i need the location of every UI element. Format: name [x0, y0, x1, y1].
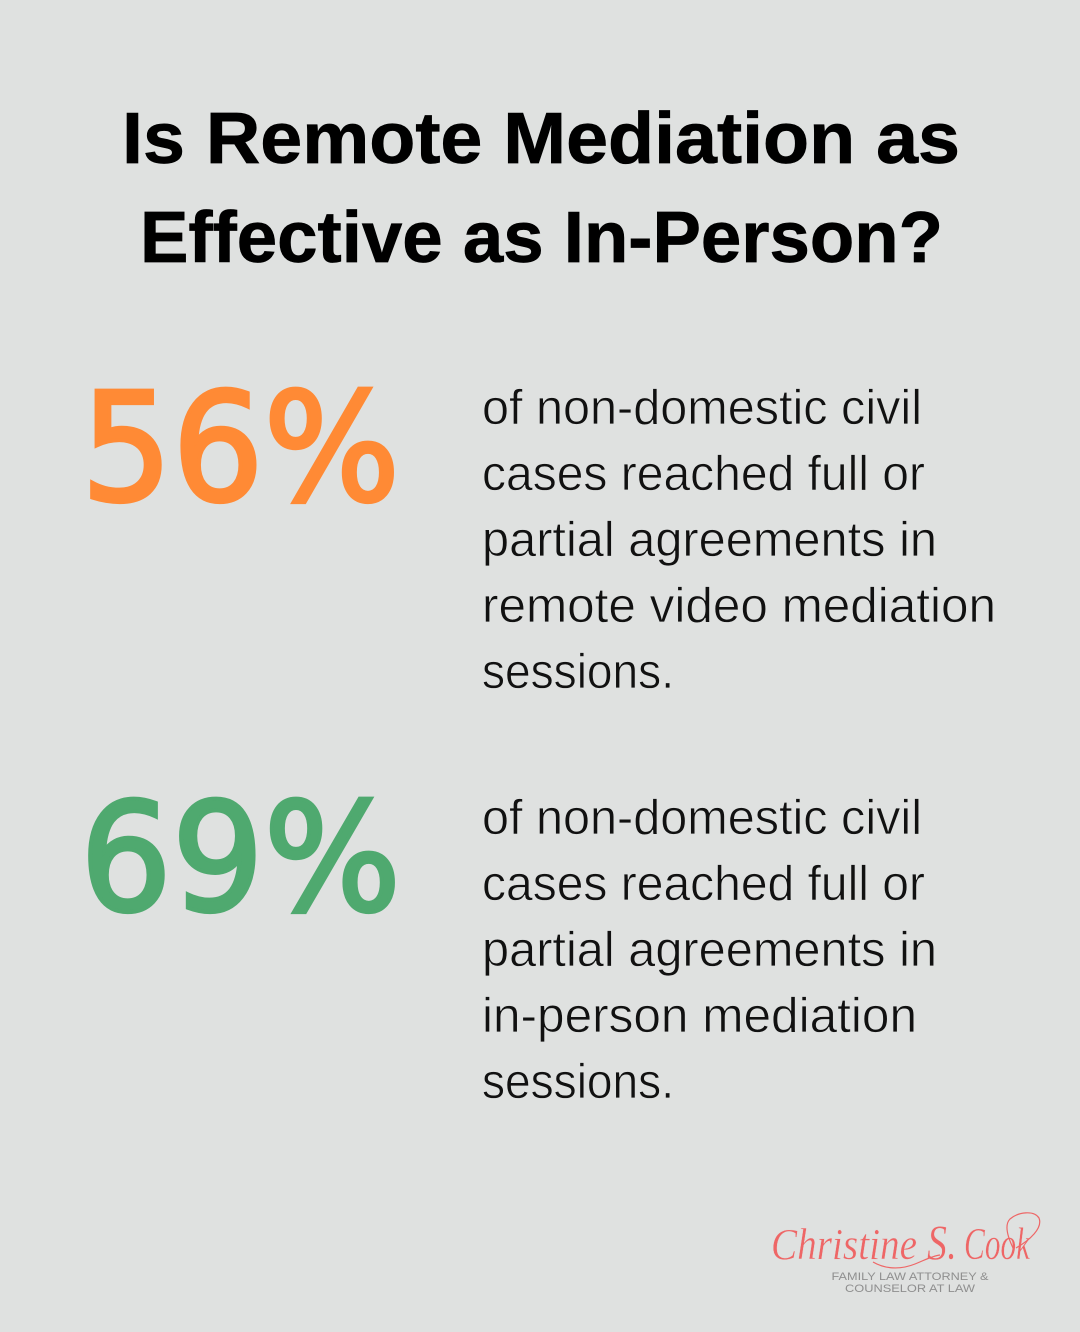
- description: remote mediation: partial agreements in: [482, 513, 937, 567]
- logo: Christine S. Cook: S.: [927, 1214, 957, 1270]
- logo: Christine S. Cook: Cook: [964, 1218, 1031, 1269]
- logo: Christine S. Cook: Christine: [771, 1220, 917, 1269]
- description: in-person mediation: of non-domestic civil: [482, 791, 922, 845]
- description: remote mediation: cases reached full or: [482, 447, 925, 501]
- description: remote mediation: [482, 381, 996, 699]
- logo: Christine S. Cook: [771, 1213, 1040, 1295]
- description: in-person mediation: sessions.: [482, 1055, 674, 1109]
- description: in-person mediation: in-person mediation: [482, 989, 917, 1043]
- title: [122, 99, 960, 278]
- title: Is Remote Mediation as: [122, 99, 960, 179]
- logo: Christine S. Cook: FAMILY LAW ATTORNEY &: [832, 1271, 989, 1283]
- description: in-person mediation: [482, 791, 937, 1109]
- title: Effective as In-Person?: [140, 198, 943, 278]
- description: remote mediation: of non-domestic civil: [482, 381, 922, 435]
- statistic: 69% in-person: 69%: [80, 772, 401, 946]
- description: remote mediation: remote video mediation: [482, 579, 996, 633]
- statistic: 56% remote: 56%: [81, 362, 400, 536]
- description: in-person mediation: partial agreements in: [482, 923, 937, 977]
- description: in-person mediation: cases reached full or: [482, 857, 925, 911]
- description: remote mediation: sessions.: [482, 645, 674, 699]
- logo: Christine S. Cook: COUNSELOR AT LAW: [845, 1283, 976, 1295]
